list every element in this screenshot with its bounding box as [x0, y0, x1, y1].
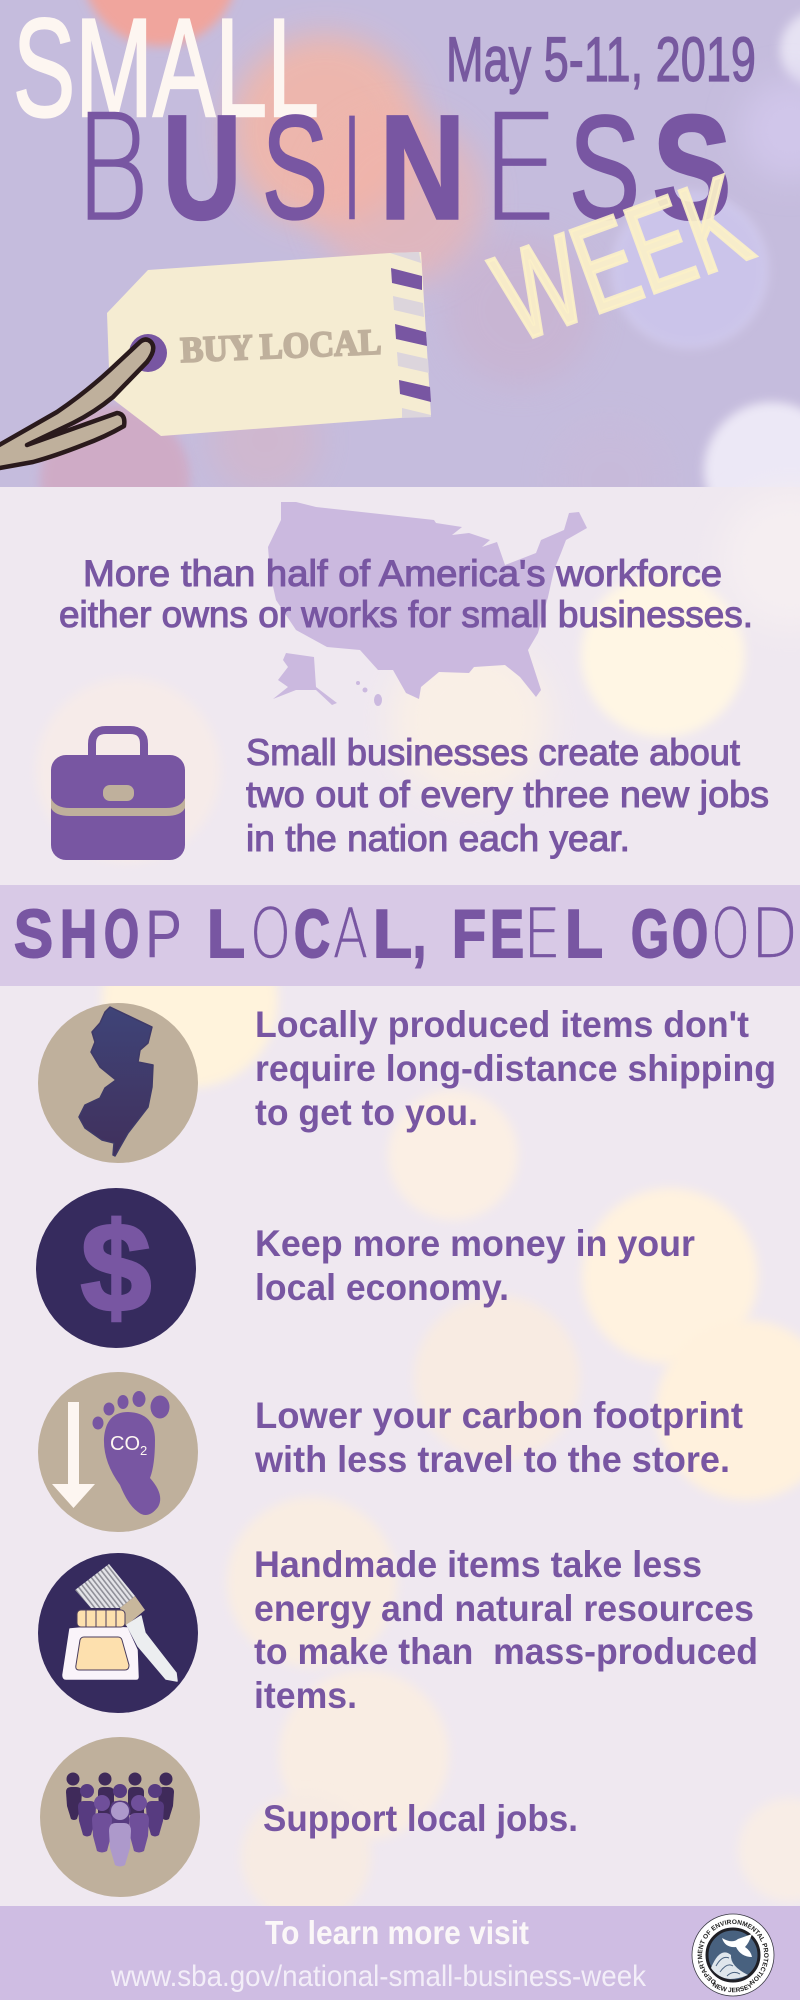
banner heading: ,: [413, 896, 426, 972]
title: BUSINESS: B: [74, 84, 150, 254]
banner heading: F: [452, 896, 486, 972]
text: handmade benefit: [254, 1544, 758, 1716]
icon: carbon footprint circle: [38, 1372, 198, 1532]
text: carbon footprint benefit: [254, 1395, 743, 1480]
banner heading: [14, 895, 798, 974]
logo: NJDEP seal: DEPARTMENT OF ENVIRONMENTAL PROTECTION: [698, 1920, 769, 1986]
icon: dollar circle: $: [81, 1197, 151, 1338]
banner: Shop local, feel good: [0, 885, 800, 986]
footer heading: To learn more visit: [265, 1914, 529, 1951]
text: local economy benefit: local economy.: [255, 1267, 509, 1308]
title: BUSINESS: U: [163, 86, 241, 250]
icon: price tag: [0, 252, 431, 469]
tag label: BUY LOCAL: [180, 322, 382, 370]
title: BUSINESS: N: [380, 86, 465, 250]
text: carbon footprint benefit: with less travel to the store.: [254, 1439, 730, 1480]
CO2 label: CO: [110, 1433, 140, 1455]
text: handmade benefit: to make than mass-produced: [254, 1631, 758, 1672]
text: local economy benefit: [255, 1223, 695, 1308]
text: workforce statement: either owns or works for small businesses.: [59, 594, 753, 635]
banner heading: E: [490, 896, 524, 972]
banner heading: L: [373, 896, 412, 972]
title: BUSINESS: S: [262, 86, 328, 250]
title: BUSINESS: [74, 84, 731, 254]
icon: briefcase: [51, 730, 185, 860]
footer band: [0, 1906, 800, 2000]
title: BUSINESS: I: [345, 86, 359, 250]
logo: NJDEP seal: NEW JERSEY: [712, 1982, 752, 1992]
banner heading: H: [60, 896, 97, 972]
icon: people group circle: [40, 1737, 200, 1897]
text: handmade benefit: Handmade items take less: [254, 1544, 702, 1585]
text: shipping benefit: [255, 1004, 776, 1133]
banner heading: C: [294, 896, 330, 972]
banner heading: P: [145, 896, 182, 972]
banner heading: E: [523, 895, 561, 974]
banner heading: O: [250, 895, 291, 974]
banner heading: O: [711, 895, 750, 974]
banner heading: G: [631, 896, 669, 972]
title: BUSINESS: S: [653, 86, 731, 250]
text: workforce statement: More than half of America's workforce: [83, 553, 722, 594]
banner heading: O: [104, 896, 139, 972]
icon: dollar circle: [36, 1188, 196, 1348]
footer url: www.sba.gov/national-small-business-week: [110, 1960, 647, 1993]
text: handmade benefit: energy and natural resources: [254, 1588, 754, 1629]
title: BUSINESS: S: [569, 86, 640, 250]
text: workforce statement: [59, 553, 753, 635]
text: handmade benefit: items.: [254, 1675, 357, 1716]
logo: NJDEP seal: [692, 1914, 774, 1996]
text: shipping benefit: require long-distance shipping: [255, 1048, 776, 1089]
background: lower bokeh panel: [0, 487, 800, 2000]
banner heading: O: [672, 896, 708, 972]
text: shipping benefit: to get to you.: [255, 1092, 478, 1133]
text: jobs statement: two out of every three new jobs: [246, 774, 769, 815]
icon: New Jersey circle: [38, 1003, 198, 1163]
icon: ink jar and brush circle: [38, 1553, 198, 1713]
background: header bokeh: [0, 0, 800, 555]
banner heading: L: [207, 896, 245, 972]
icon: US map: [268, 502, 587, 706]
banner heading: S: [14, 896, 53, 972]
CO2 label: 2: [140, 1443, 147, 1458]
text: shipping benefit: Locally produced items don't: [255, 1004, 749, 1045]
banner heading: L: [565, 896, 603, 972]
text: jobs statement: [246, 732, 769, 859]
text: jobs statement: Small businesses create about: [246, 732, 741, 773]
tag string: [0, 340, 153, 469]
banner heading: A: [333, 895, 368, 974]
title: BUSINESS: E: [480, 84, 560, 254]
text: jobs statement: in the nation each year.: [246, 818, 630, 859]
text: carbon footprint benefit: Lower your carbon footprint: [255, 1395, 743, 1436]
text: local economy benefit: Keep more money in your: [255, 1223, 695, 1264]
text: local jobs benefit: Support local jobs.: [263, 1798, 578, 1839]
